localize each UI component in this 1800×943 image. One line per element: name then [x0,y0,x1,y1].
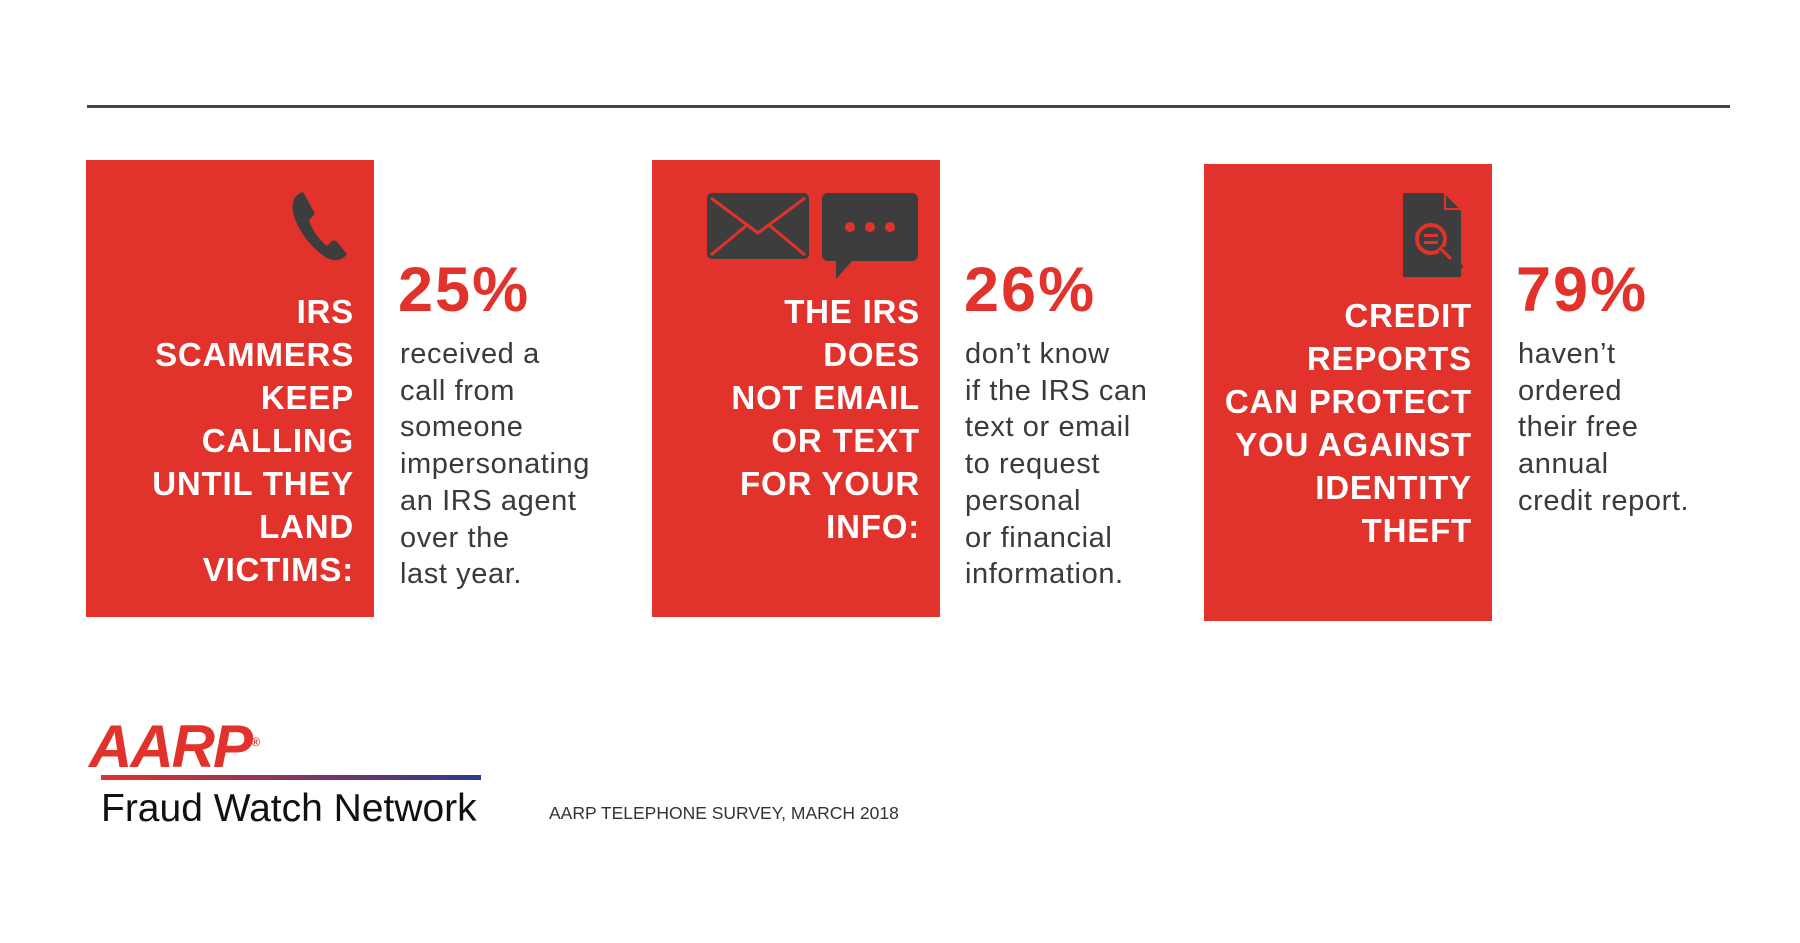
heading text: THEFT [1362,512,1472,549]
text: 79% description: their free [1518,411,1638,443]
text: 26% description: to request [965,448,1100,480]
text: 25% description: an IRS agent [400,485,576,517]
text: 26% description [965,338,1148,590]
text: 25% description: last year. [400,558,522,590]
heading text: CALLING [202,422,354,459]
text: 79% description: haven’t [1518,338,1616,370]
source note: AARP TELEPHONE SURVEY, MARCH 2018 [549,803,899,823]
text: 25% description: someone [400,411,524,443]
text: 26% description: text or email [965,411,1131,443]
heading text [1225,297,1472,549]
heading text: THE IRS [784,293,920,330]
heading text: IRS [297,293,354,330]
panel: IRS does not email [652,160,940,617]
text: 25% description [400,338,590,590]
heading text [152,293,354,588]
text: 79% description: ordered [1518,375,1622,407]
heading text: INFO: [826,508,920,545]
stat: 25%: 25% [398,255,530,325]
logo: AARP Fraud Watch Network [88,713,481,830]
text: 25% description: impersonating [400,448,590,480]
heading text: FOR YOUR [740,465,920,502]
text: 26% description: personal [965,485,1081,517]
text: 25% description: call from [400,375,515,407]
text: 79% description: annual [1518,448,1609,480]
stat: 79%: 79% [1516,255,1648,325]
heading text: SCAMMERS [155,336,354,373]
text: 26% description: or financial [965,522,1112,554]
heading text: YOU AGAINST [1235,426,1472,463]
text: 26% description: information. [965,558,1124,590]
panel: credit reports [1204,164,1492,621]
text: 26% description: if the IRS can [965,375,1148,407]
heading text: IDENTITY [1315,469,1472,506]
heading text [731,293,920,545]
icon: phone [292,192,347,260]
heading text: DOES [823,336,920,373]
heading text: VICTIMS: [203,551,354,588]
icon: envelope [707,193,809,259]
top rule [87,105,1730,108]
heading text: OR TEXT [771,422,920,459]
gradient rule [101,775,481,780]
text: 79% description [1518,338,1689,517]
heading text: CAN PROTECT [1225,383,1472,420]
text: 79% description: credit report. [1518,485,1689,517]
text: 25% description: received a [400,338,540,370]
panel: IRS scammers [86,160,374,617]
heading text: LAND [259,508,354,545]
text: 26% description: don’t know [965,338,1110,370]
heading text: CREDIT [1344,297,1472,334]
icon: document magnifier [1403,193,1464,277]
network name: Fraud Watch Network [101,787,477,830]
heading text: KEEP [261,379,354,416]
heading text: UNTIL THEY [152,465,354,502]
heading text: REPORTS [1307,340,1472,377]
heading text: NOT EMAIL [731,379,920,416]
text: 25% description: over the [400,522,510,554]
icon: chat bubble [822,193,918,279]
stat: 26%: 26% [964,255,1096,325]
AARP wordmark: AARP® [89,713,260,780]
